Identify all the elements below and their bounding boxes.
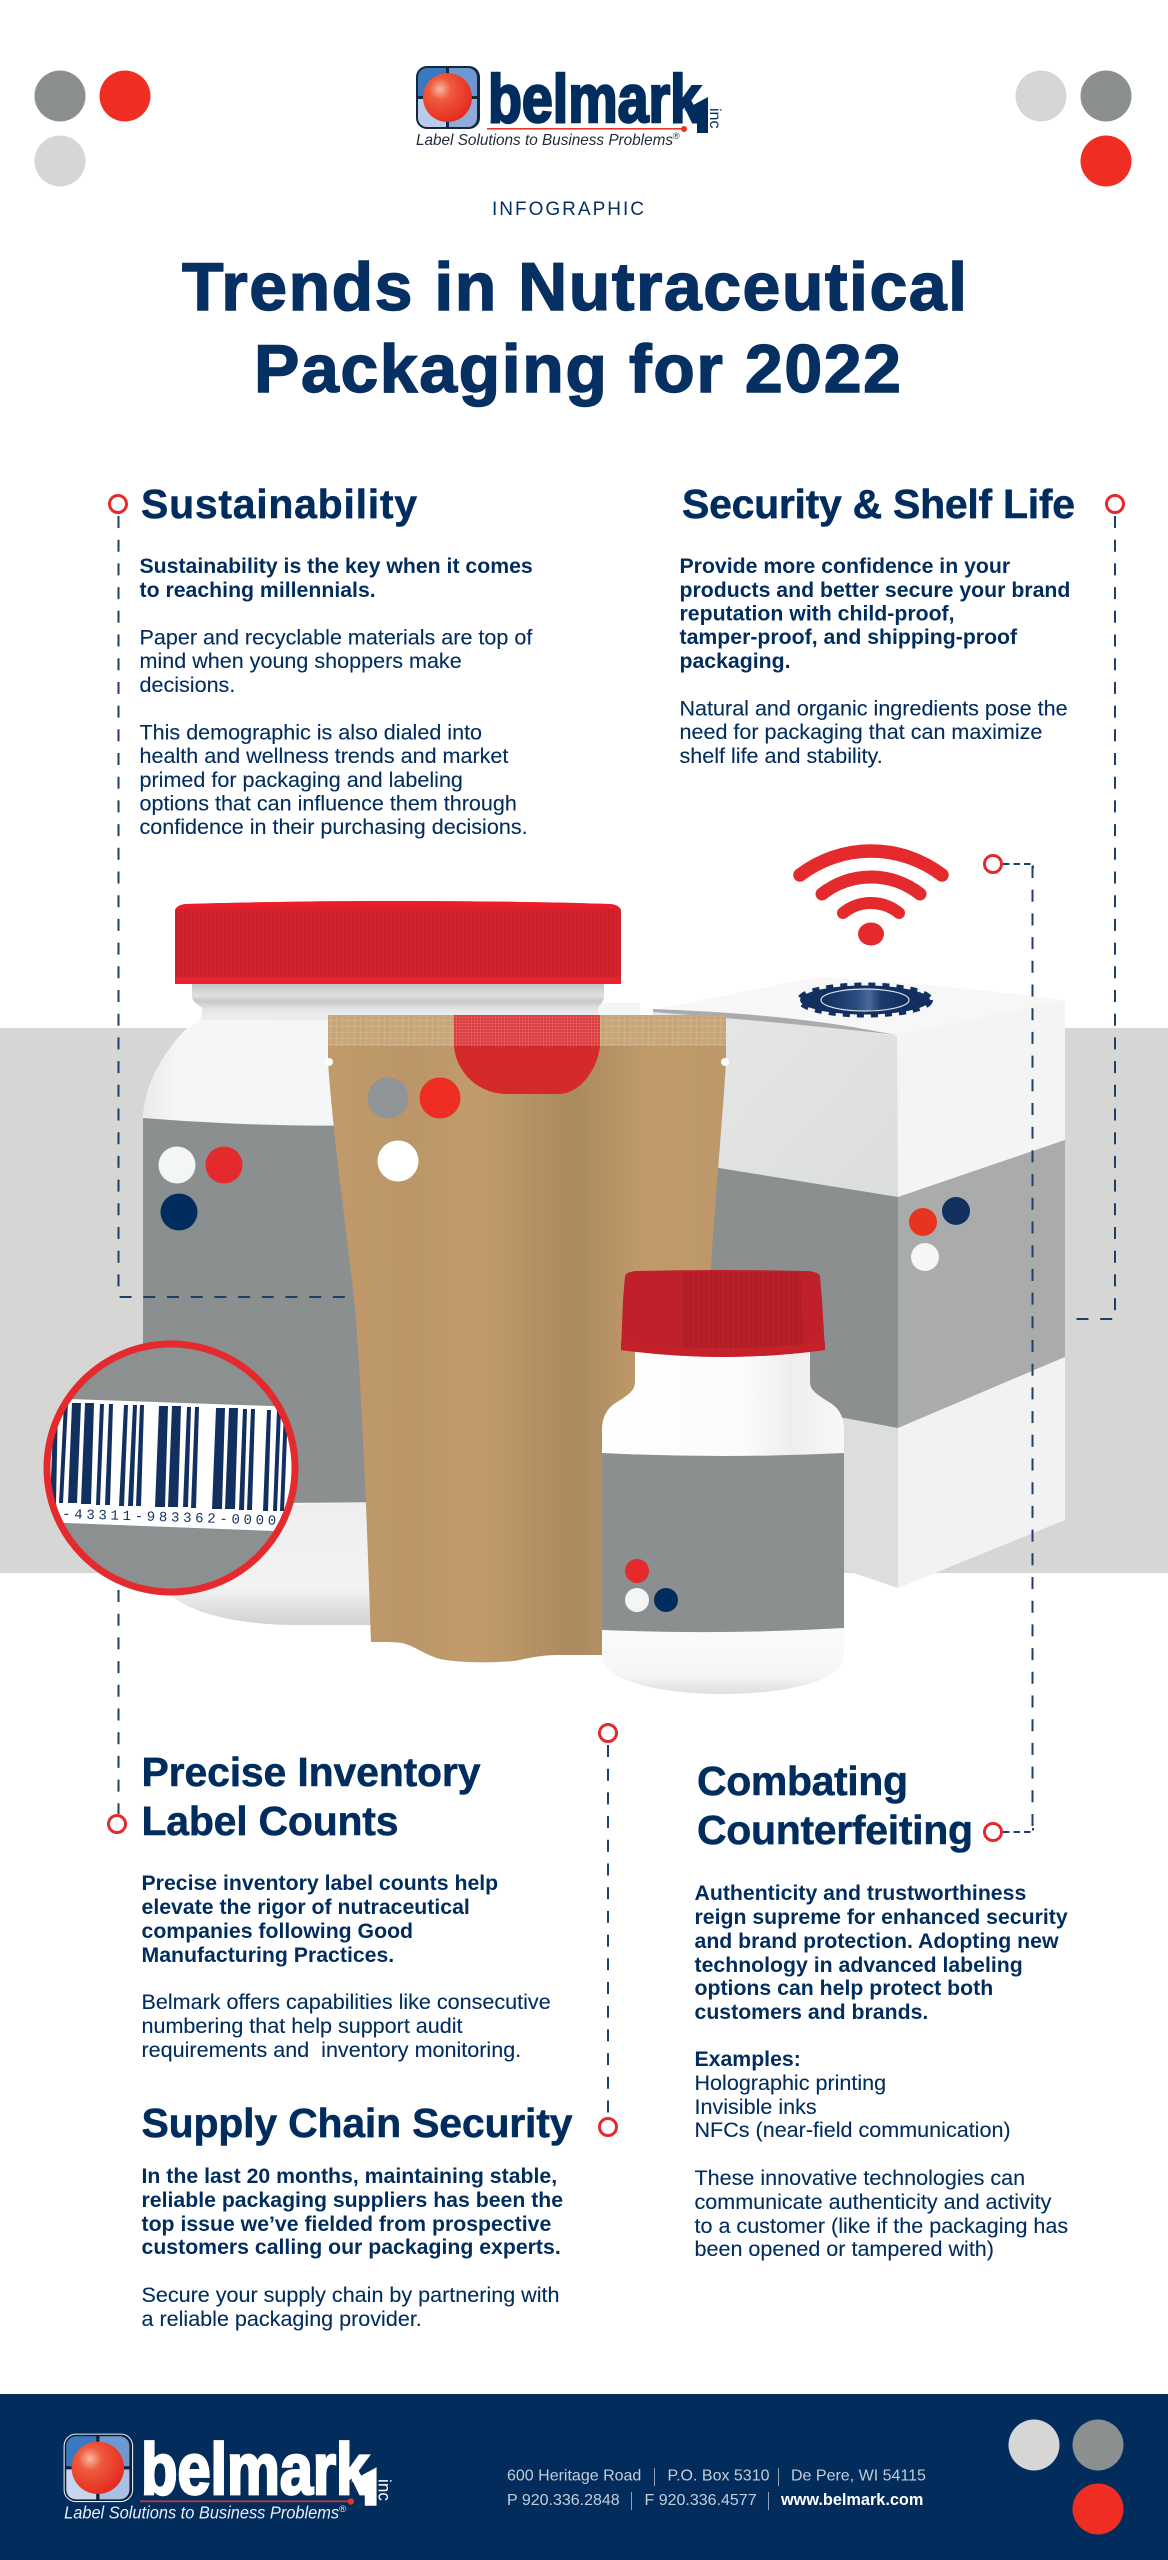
footer logo: belmark	[141, 2429, 370, 2510]
text: Supply Chain body: a reliable packaging provider.	[142, 2306, 422, 2331]
text: Sustainability body: mind when young shoppers make	[140, 648, 462, 673]
footer logo: inc	[375, 2479, 394, 2501]
text: Sustainability body: to reaching millennials.	[140, 578, 376, 602]
text: Sustainability body: health and wellness trends and market	[140, 743, 508, 768]
heading: Precise Inventory Label Counts: Label Counts	[142, 1798, 398, 1844]
marker ring: supply chain	[600, 2118, 616, 2136]
marker ring: precise inventory	[108, 1816, 126, 1832]
text: Supply Chain body: customers calling our packaging experts.	[142, 2235, 561, 2259]
heading: Sustainability: Sustainability	[141, 481, 417, 527]
heading: Precise Inventory Label Counts: Precise Inventory	[142, 1749, 481, 1795]
dashed connector: Security & Shelf Life	[1065, 516, 1115, 1319]
text: Security body: need for packaging that can maximize	[680, 719, 1042, 744]
text: Sustainability body	[140, 554, 533, 839]
footer band	[0, 2394, 1168, 2560]
text: Security body	[680, 554, 1070, 768]
text: Precise Inventory body: numbering that help support audit	[142, 2013, 463, 2038]
heading: Combating Counterfeiting: Counterfeiting	[697, 1807, 973, 1853]
illustration: small bottle	[602, 1270, 844, 1694]
text: Sustainability body: options that can influence them through	[140, 790, 517, 816]
dashed connector: Combating Counterfeiting vertical	[1032, 866, 1034, 1832]
text: Precise Inventory body: requirements and inventory monitoring.	[142, 2037, 521, 2062]
footer address: De Pere, WI 54115	[791, 2468, 926, 2484]
footer dots	[1008, 2420, 1124, 2534]
footer address: P.O. Box 5310	[668, 2468, 770, 2484]
illustration: large jar	[142, 901, 640, 1625]
text: Precise Inventory body	[142, 1871, 551, 2062]
text: Counterfeiting body: Authenticity and trustworthiness	[694, 1881, 1026, 1905]
text: Sustainability body: Sustainability is the key when it comes	[140, 554, 533, 578]
text: Counterfeiting body: Holographic printing	[694, 2070, 886, 2095]
text: Counterfeiting body: to a customer (like if the packaging has	[694, 2213, 1068, 2238]
heading: Combating Counterfeiting: Combating	[697, 1758, 908, 1804]
text: Counterfeiting body: communicate authenticity and activity	[694, 2189, 1052, 2214]
text: Precise Inventory body: Precise inventory label counts help	[142, 1871, 498, 1895]
decorative dots: top left	[34, 70, 150, 186]
marker ring: wifi connector	[984, 856, 1002, 872]
text: Security body: reputation with child-proof,	[680, 602, 955, 626]
footer logo	[64, 2429, 394, 2523]
text: Precise Inventory body: elevate the rigor of nutraceutical	[142, 1895, 470, 1919]
logo: Belmark header: Label Solutions to Business Problems	[416, 132, 673, 149]
marker ring: Sustainability	[110, 496, 126, 512]
text: Precise Inventory body: Manufacturing Practices.	[142, 1943, 394, 1967]
box label dots	[909, 1197, 970, 1271]
dashed connector: Sustainability	[118, 516, 354, 1297]
section: Security & Shelf Life	[680, 481, 1075, 768]
text: Counterfeiting body: These innovative technologies can	[694, 2165, 1025, 2190]
text: Sustainability body: This demographic is also dialed into	[140, 720, 482, 744]
logo: Belmark header	[416, 61, 723, 149]
barcode digits: -43311-983362-0000	[62, 1507, 280, 1530]
jar lid	[175, 901, 621, 984]
text: Security body: shelf life and stability.	[680, 743, 883, 768]
text: Counterfeiting body: been opened or tampered with)	[694, 2236, 994, 2261]
barcode magnifier callout	[40, 1344, 300, 1592]
logo: Belmark header: ®	[673, 131, 680, 141]
title: Packaging for 2022	[254, 331, 901, 407]
footer logo: Label Solutions to Business Problems	[64, 2504, 340, 2523]
title	[182, 249, 967, 407]
eyebrow label: INFOGRAPHIC: INFOGRAPHIC	[492, 199, 644, 220]
dashed connector: Supply Chain	[607, 1745, 609, 2115]
dashed connector: Precise Inventory	[118, 1590, 120, 1814]
section: Sustainability	[140, 481, 533, 839]
logo: Belmark header: inc	[706, 108, 723, 128]
section: Precise Inventory Label Counts	[142, 1749, 551, 2062]
text: Counterfeiting body: Examples:	[694, 2047, 801, 2071]
footer address	[507, 2468, 926, 2510]
text: Counterfeiting body: customers and brands.	[694, 2000, 928, 2024]
decorative dots: top right	[1016, 70, 1132, 186]
text: Counterfeiting body: technology in advanced labeling	[694, 1953, 1023, 1977]
heading: Precise Inventory Label Counts	[142, 1749, 481, 1844]
text: Security body: tamper-proof, and shipping-proof	[680, 625, 1018, 649]
illustration: carton box	[650, 977, 1065, 1588]
footer address: www.belmark.com	[780, 2491, 923, 2509]
marker ring: counterfeiting	[984, 1824, 1002, 1840]
text: Sustainability body: Paper and recyclable materials are top of	[140, 624, 533, 650]
heading: Supply Chain Security: Supply Chain Security	[142, 2100, 573, 2146]
section: Combating Counterfeiting	[694, 1758, 1068, 2261]
text: Counterfeiting body: NFCs (near-field communication)	[694, 2117, 1011, 2142]
text: Counterfeiting body: options can help protect both	[694, 1976, 993, 2000]
bottle label dots	[625, 1559, 678, 1612]
text: Supply Chain body: In the last 20 months, maintaining stable,	[142, 2164, 557, 2188]
text: Counterfeiting body: and brand protection. Adopting new	[694, 1929, 1059, 1953]
jar label dots	[158, 1146, 242, 1230]
bottle cap	[621, 1270, 825, 1357]
text: Counterfeiting body	[694, 1881, 1068, 2261]
text: Precise Inventory body: Belmark offers capabilities like consecutive	[142, 1989, 551, 2014]
text: Sustainability body: confidence in their purchasing decisions.	[140, 814, 528, 839]
text: Security body: products and better secure your brand	[680, 578, 1070, 602]
icon: wifi / NFC signal	[800, 851, 942, 946]
logo: Belmark header: belmark	[488, 61, 701, 137]
text: Sustainability body: decisions.	[140, 672, 235, 697]
marker ring: upper middle	[600, 1724, 616, 1742]
heading: Combating Counterfeiting	[697, 1758, 973, 1853]
background band behind packaging	[0, 1028, 1168, 1573]
illustration: kraft pouch	[325, 1015, 729, 1662]
footer logo: ®	[339, 2504, 346, 2515]
title: Trends in Nutraceutical	[182, 249, 967, 325]
text: Supply Chain body: reliable packaging suppliers has been the	[142, 2188, 563, 2212]
pouch dots	[368, 1078, 460, 1182]
seal sticker	[800, 986, 930, 1014]
footer address: F 920.336.4577	[644, 2492, 757, 2509]
heading: Security & Shelf Life: Security & Shelf Life	[682, 481, 1075, 527]
text: Security body: packaging.	[680, 649, 791, 673]
text: Counterfeiting body: reign supreme for enhanced security	[694, 1905, 1068, 1929]
dashed connector: top short link	[1003, 864, 1033, 868]
text: Supply Chain body: Secure your supply chain by partnering with	[142, 2282, 560, 2307]
text: Supply Chain body	[142, 2164, 563, 2331]
text: Supply Chain body: top issue we’ve fielded from prospective	[142, 2212, 551, 2236]
text: Counterfeiting body: Invisible inks	[694, 2094, 817, 2119]
dashed connector: bottom short link	[1003, 1828, 1033, 1832]
section: Supply Chain Security	[142, 2100, 573, 2331]
text: Security body: Provide more confidence in your	[680, 554, 1010, 578]
text: Precise Inventory body: companies following Good	[142, 1919, 413, 1943]
footer address: P 920.336.2848	[507, 2492, 620, 2509]
marker ring: Security	[1106, 496, 1124, 512]
text: Security body: Natural and organic ingredients pose the	[680, 696, 1068, 720]
footer address: 600 Heritage Road	[507, 2468, 641, 2484]
text: Sustainability body: primed for packaging and labeling	[140, 767, 463, 792]
